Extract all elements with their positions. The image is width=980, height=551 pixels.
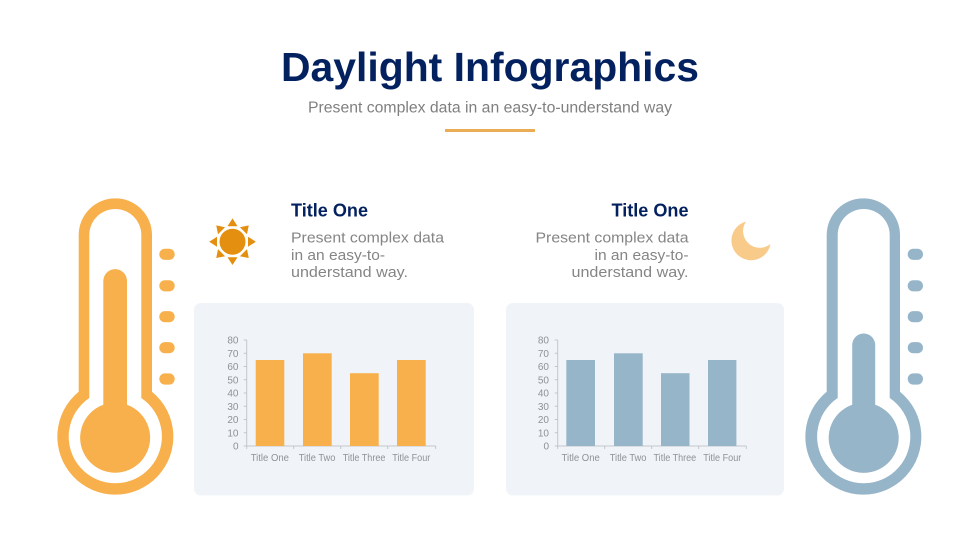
text block: left xyxy=(291,200,445,281)
bars xyxy=(256,353,426,446)
bar chart: left xyxy=(227,336,436,464)
x axis labels: Title Three xyxy=(654,453,697,464)
y axis labels: 0 xyxy=(543,442,549,452)
left description xyxy=(291,230,445,281)
left heading: Title One xyxy=(291,200,368,220)
thermometer outline xyxy=(57,198,173,495)
y axis labels: 20 xyxy=(538,415,549,426)
right thermometer xyxy=(805,198,923,495)
y axis labels: 60 xyxy=(227,362,239,373)
x axis labels: Title Three xyxy=(343,453,386,464)
mercury column xyxy=(80,269,150,473)
right heading: Title One xyxy=(612,200,688,220)
x axis labels: Title One xyxy=(562,453,600,464)
left description: in an easy-to- xyxy=(291,247,385,264)
x axis labels: Title Two xyxy=(299,453,336,464)
subtitle: Present complex data in an easy-to-understand way xyxy=(308,100,672,116)
y axis labels: 40 xyxy=(538,388,549,400)
x axis labels: Title Two xyxy=(610,453,647,464)
x axis labels xyxy=(562,453,742,464)
mercury column xyxy=(829,334,899,473)
scale ticks xyxy=(159,249,175,385)
y axis labels: 10 xyxy=(538,428,549,439)
y axis labels: 0 xyxy=(233,442,239,452)
icon: moon xyxy=(731,222,770,260)
axes xyxy=(244,340,436,449)
y axis labels: 80 xyxy=(538,336,549,346)
icon: sun xyxy=(209,218,256,265)
y axis labels: 80 xyxy=(227,336,239,346)
y axis labels: 10 xyxy=(227,428,239,439)
y axis labels: 70 xyxy=(538,349,549,360)
axes xyxy=(555,340,746,449)
bar chart: right xyxy=(538,336,746,464)
y axis labels xyxy=(538,336,549,452)
y axis labels: 60 xyxy=(538,362,549,373)
accent underline xyxy=(445,129,535,132)
text block: right xyxy=(536,200,689,281)
x axis labels: Title Four xyxy=(392,453,431,464)
title: Daylight Infographics xyxy=(281,44,699,90)
y axis labels: 30 xyxy=(538,402,549,413)
y axis labels: 50 xyxy=(227,375,239,386)
right description: in an easy-to- xyxy=(594,247,688,264)
y axis labels: 70 xyxy=(227,349,239,360)
left thermometer xyxy=(57,198,175,495)
y axis labels xyxy=(227,336,239,452)
bars xyxy=(566,353,736,446)
scale ticks xyxy=(908,249,923,385)
thermometer outline xyxy=(805,198,921,495)
header xyxy=(281,44,699,132)
right description: Present complex data xyxy=(536,230,689,246)
y axis labels: 50 xyxy=(538,375,549,386)
right description xyxy=(536,230,689,281)
left description: Present complex data xyxy=(291,230,445,246)
y axis labels: 20 xyxy=(227,415,239,426)
y axis labels: 40 xyxy=(227,388,239,400)
panel: left chart xyxy=(194,303,474,496)
x axis labels: Title One xyxy=(251,453,289,464)
y axis labels: 30 xyxy=(227,402,239,413)
panel: right chart xyxy=(506,303,784,496)
x axis labels: Title Four xyxy=(703,453,742,464)
x axis labels xyxy=(251,453,431,464)
left description: understand way. xyxy=(291,264,408,281)
right description: understand way. xyxy=(572,264,688,281)
